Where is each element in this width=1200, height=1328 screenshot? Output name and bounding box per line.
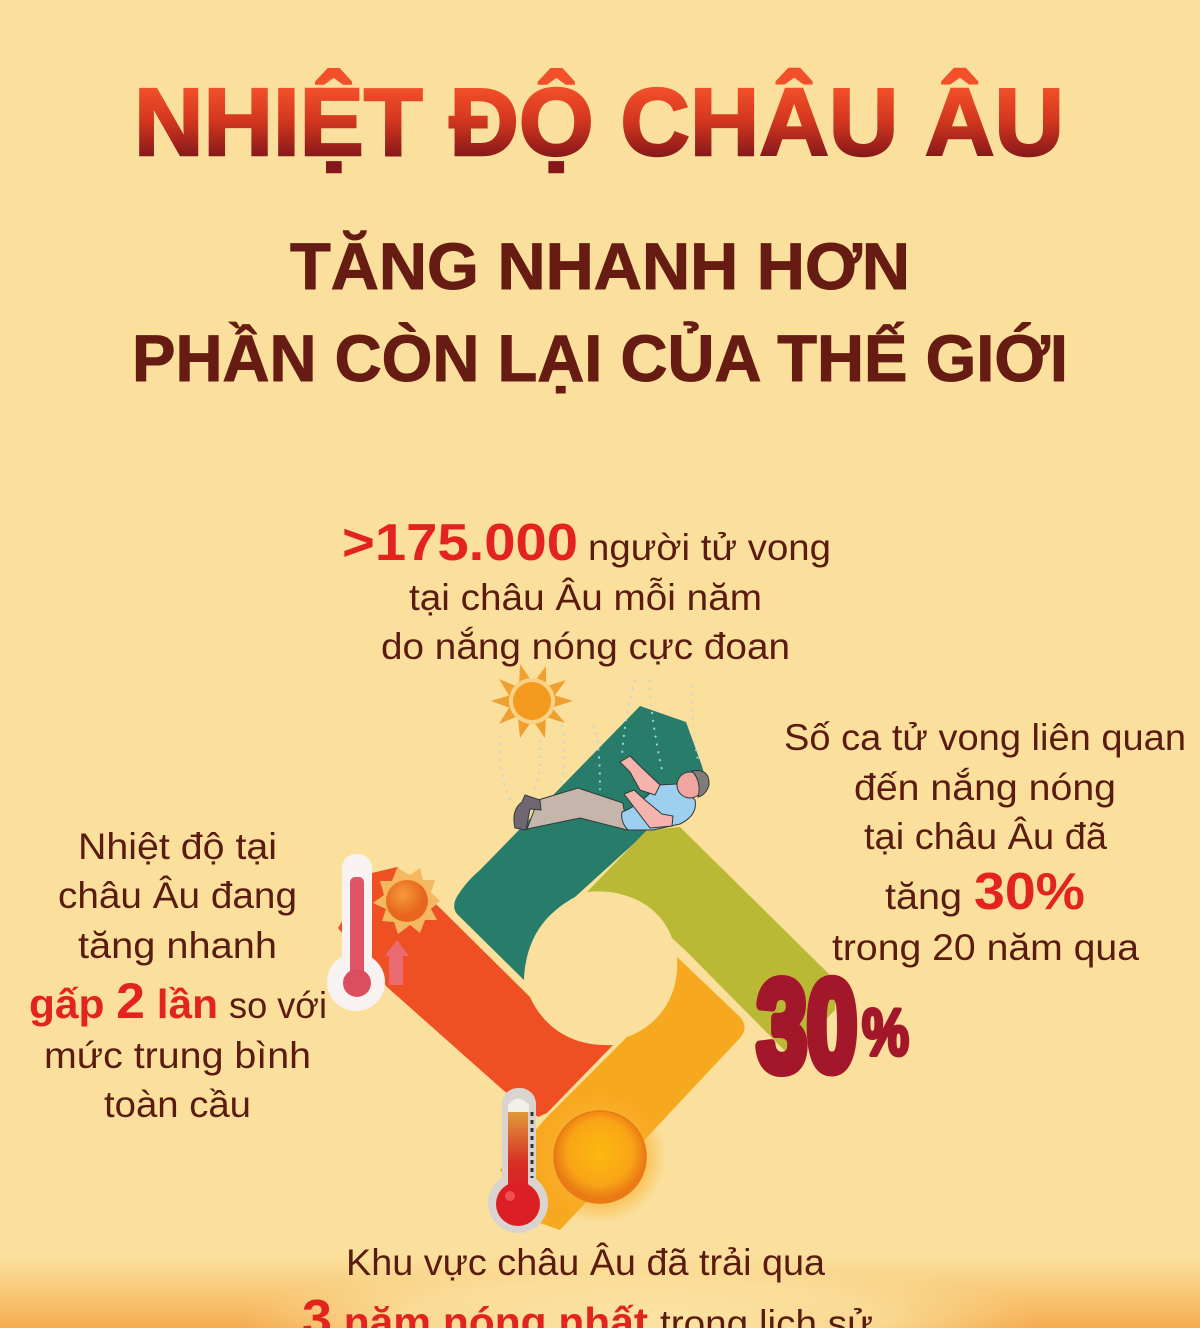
heat shimmer dots (500, 680, 698, 800)
text block: deaths per year: người tử vong (588, 527, 831, 568)
shoes (514, 795, 541, 830)
text block: twice the global rate (29, 826, 327, 1125)
icon: white thermometer (327, 854, 385, 1011)
segment: olive (587, 827, 835, 1056)
text block: 30 percent rise: trong 20 năm qua (832, 927, 1139, 968)
legs (527, 788, 627, 830)
text block: twice the global rate: tăng nhanh (78, 925, 277, 966)
far arm (620, 756, 660, 795)
title: NHIỆT ĐỘ CHÂU ÂU (134, 68, 1064, 176)
text block: deaths per year: tại châu Âu mỗi năm (409, 577, 762, 618)
icon: glowing sun (534, 1091, 666, 1223)
text block: 30 percent rise: Số ca tử vong liên quan (784, 717, 1186, 758)
subtitle: PHẦN CÒN LẠI CỦA THẾ GIỚI (132, 321, 1068, 395)
text block: 30 percent rise: tại châu Âu đã (864, 816, 1107, 857)
text block: 30 percent rise: 30% (974, 863, 1085, 921)
text block: twice the global rate: Nhiệt độ tại (78, 826, 277, 867)
text block: 30 percent rise: tăng (885, 876, 962, 917)
bottom heat glow (0, 1256, 1200, 1328)
icon: cartoon sun (491, 664, 573, 738)
text block: twice the global rate: gấp 2 lần (29, 973, 218, 1029)
text block: twice the global rate: toàn cầu (104, 1084, 251, 1125)
subtitle: TĂNG NHANH HƠN (290, 229, 910, 303)
text block: hottest years: Khu vực châu Âu đã trải qua (346, 1242, 825, 1283)
text block: 30 percent rise (784, 717, 1186, 968)
text block: twice the global rate: mức trung bình (44, 1035, 311, 1076)
icon: red liquid thermometer (488, 1088, 548, 1233)
icon: pink up arrow (385, 940, 409, 985)
hair (692, 771, 709, 797)
head (677, 772, 703, 798)
text block: 30 percent rise: đến nắng nóng (854, 767, 1116, 808)
icon: orange sun with star rays (373, 868, 440, 934)
text block: deaths per year (342, 514, 831, 667)
text block: deaths per year: do nắng nóng cực đoan (381, 626, 790, 667)
text block: deaths per year: >175.000 (342, 514, 578, 572)
subtitle (132, 229, 1068, 395)
icon: 3D 30 percent: 30 (757, 955, 857, 1098)
text block: twice the global rate: châu Âu đang (58, 875, 297, 916)
icon: man lying down (514, 756, 709, 830)
diagram: four-arrow pinwheel (338, 706, 835, 1230)
segment: teal (454, 706, 706, 980)
text block: twice the global rate: so với (229, 985, 327, 1026)
segment: red (338, 867, 613, 1117)
near arm (624, 790, 673, 828)
segment: amber (500, 957, 745, 1230)
shirt (622, 784, 695, 830)
icon: 3D 30 percent: % (862, 995, 909, 1069)
text block: hottest years (302, 1242, 873, 1328)
